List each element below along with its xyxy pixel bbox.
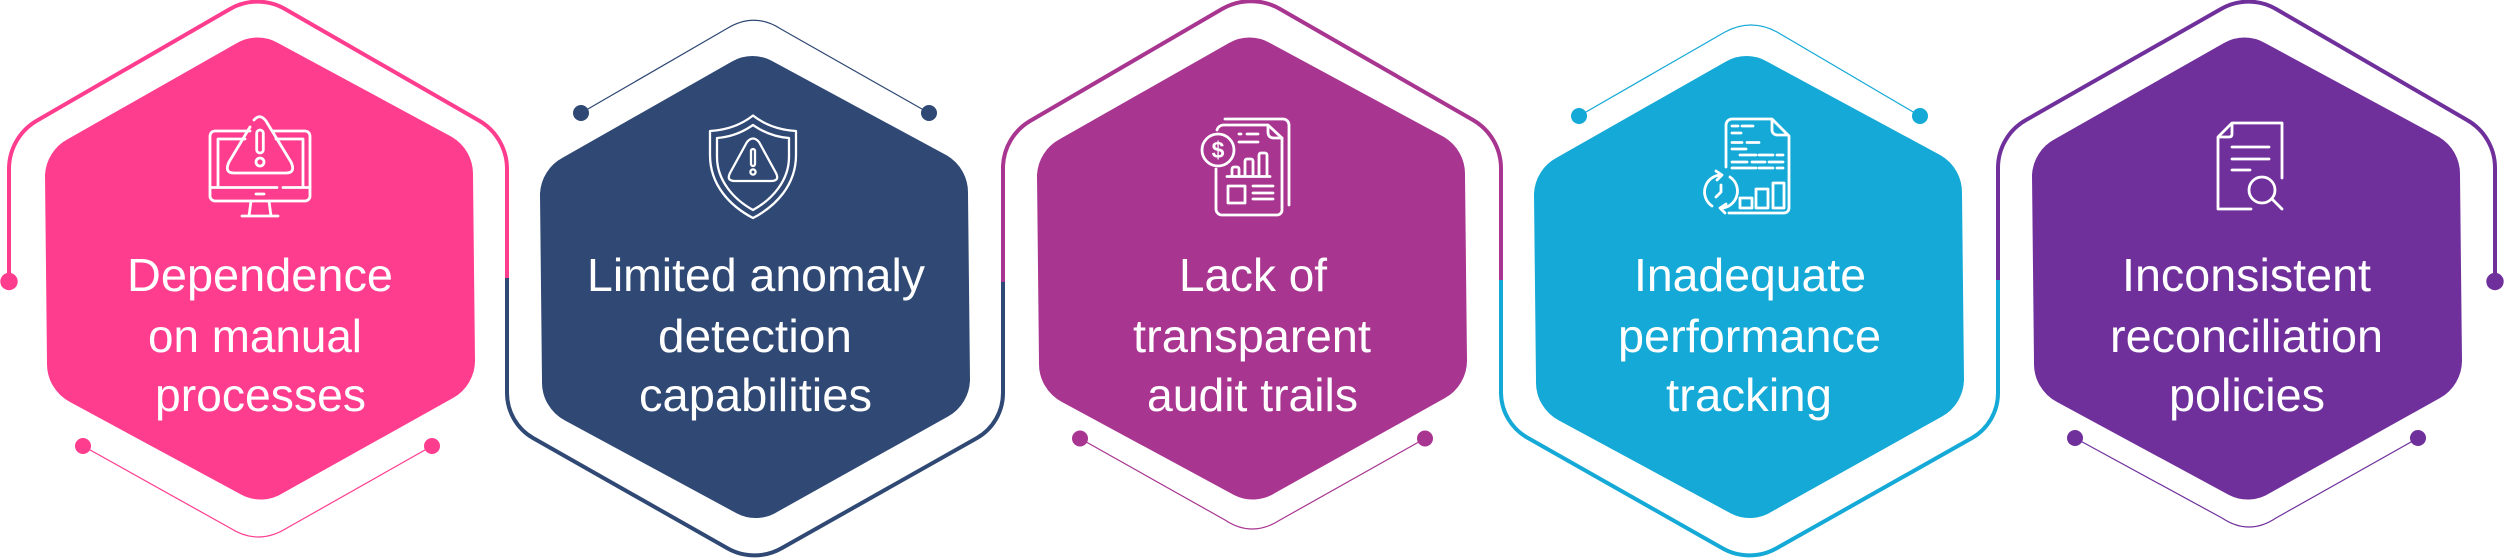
connector: thin navy line with dots [573,20,937,121]
text: inadequate performance tracking: Inadequate [1634,249,1866,301]
hexagon: magenta [1037,38,1467,500]
hexagon: navy [540,56,970,518]
connector: thin purple line with dots [2067,430,2426,527]
text: lack of transparent audit trails: audit trails [1147,369,1358,421]
text: inadequate performance tracking: performance [1618,310,1881,362]
text: lack of transparent audit trails [1133,249,1371,421]
text: limited anomaly detection capabilities: capabilities [639,369,872,421]
text: inadequate performance tracking: tracking [1666,369,1832,421]
text: lack of transparent audit trails: Lack of [1179,249,1327,301]
text: dependence on manual processes: on manual [148,310,362,362]
text: inadequate performance tracking [1618,249,1881,421]
panel: inconsistent reconciliation policies [1998,2,2504,527]
hexagon: cyan [1534,56,1964,518]
text: inconsistent reconciliation policies [2110,249,2383,421]
text: limited anomaly detection capabilities [587,249,925,421]
text: limited anomaly detection capabilities: detection [658,310,852,362]
panel: dependence on manual processes [0,2,507,537]
outline: magenta outer hexagon arc [1003,1,1501,282]
text: inconsistent reconciliation policies: policies [2169,369,2325,421]
text: lack of transparent audit trails: transparent [1133,310,1371,362]
text: inconsistent reconciliation policies: reconciliation [2110,310,2383,362]
icon: document with chart and cycle clock [1705,119,1789,213]
icon: document with magnifying glass [2218,123,2282,209]
connector: thin pink line with dots [75,438,440,537]
icon: shield with warning triangle [710,116,796,218]
text: limited anomaly detection capabilities: Limited anomaly [587,249,925,301]
text: inconsistent reconciliation policies: Inconsistent [2122,249,2371,301]
outline: purple outer hexagon arc [1998,2,2504,290]
outline: navy outer hexagon arc [507,278,1003,555]
text: dependence on manual processes [127,249,393,421]
icon glyph: dollar sign: $ [1212,137,1225,163]
outline: cyan outer hexagon arc [1501,280,1998,555]
connector: thin magenta line with dots [1072,430,1433,529]
connector: thin cyan line with dots [1571,25,1928,124]
hexagon: pink [45,38,475,500]
panel: inadequate performance tracking [1501,25,1998,555]
panel: limited anomaly detection capabilities [507,20,1003,555]
outline: pink outer hexagon arc [0,2,507,290]
icon: monitor with warning triangle [210,117,310,216]
text: dependence on manual processes: processes [155,369,366,421]
panel: lack of transparent audit trails [1003,1,1501,529]
icon: financial report with dollar coin [1202,119,1289,215]
text: dependence on manual processes: Dependence [127,249,393,301]
hexagon: purple [2032,38,2462,500]
